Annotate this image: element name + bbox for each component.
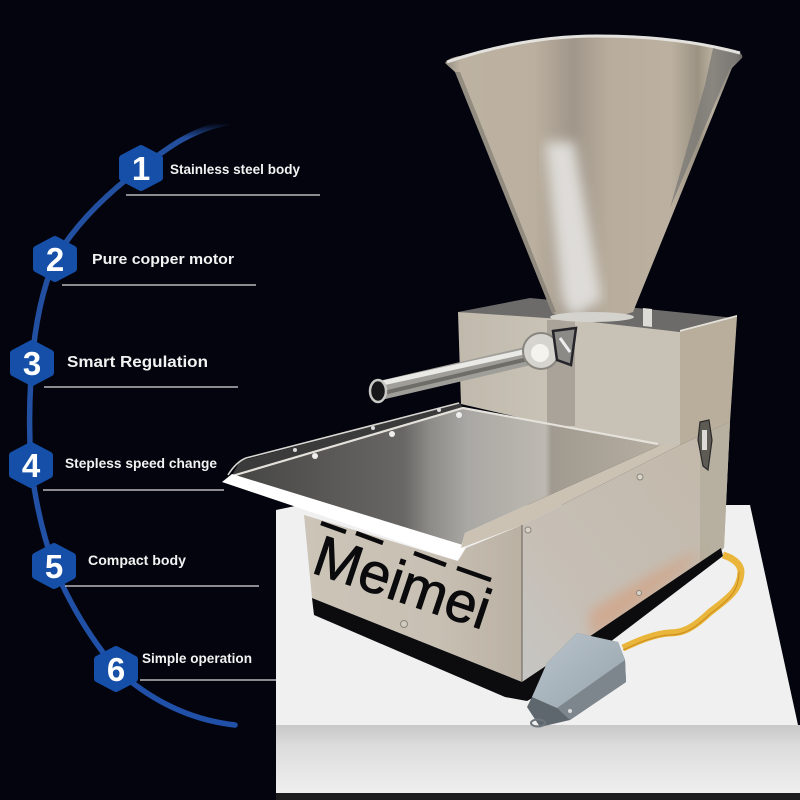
blue arc timeline <box>30 123 235 725</box>
item 4: Stepless speed change: 4 <box>22 447 41 484</box>
item 4: Stepless speed change: Stepless speed change <box>65 456 217 471</box>
item 3: Smart Regulation: Smart Regulation <box>67 354 208 371</box>
item 6: Simple operation <box>98 650 276 688</box>
item 4: Stepless speed change <box>13 446 224 490</box>
upper motor box <box>458 298 737 447</box>
funnel hopper <box>445 35 742 322</box>
item 2: Pure copper motor: 2 <box>46 241 64 278</box>
machine <box>222 35 742 727</box>
item 1: Stainless steel body <box>123 149 320 195</box>
yellow cable <box>623 555 741 650</box>
item 6: Simple operation: Simple operation <box>142 651 252 666</box>
outlet pipe with clamp <box>370 328 576 402</box>
item 6: Simple operation: 6 <box>107 651 125 688</box>
tray <box>222 403 680 561</box>
item 5: Compact body: Compact body <box>88 553 187 568</box>
foot pedal <box>527 633 626 727</box>
item 2: Pure copper motor: Pure copper motor <box>92 251 234 268</box>
item 1: Stainless steel body: 1 <box>132 150 150 187</box>
item 3: Smart Regulation: 3 <box>23 345 41 382</box>
item 3: Smart Regulation <box>14 344 238 387</box>
item 5: Compact body <box>36 547 259 586</box>
lower body <box>304 422 730 701</box>
brand name Meimei: Meimei <box>306 524 499 642</box>
item 5: Compact body: 5 <box>45 548 63 585</box>
item 1: Stainless steel body: Stainless steel body <box>170 162 300 177</box>
white platform <box>276 505 800 800</box>
item 2: Pure copper motor <box>37 240 256 285</box>
latch <box>698 420 712 470</box>
